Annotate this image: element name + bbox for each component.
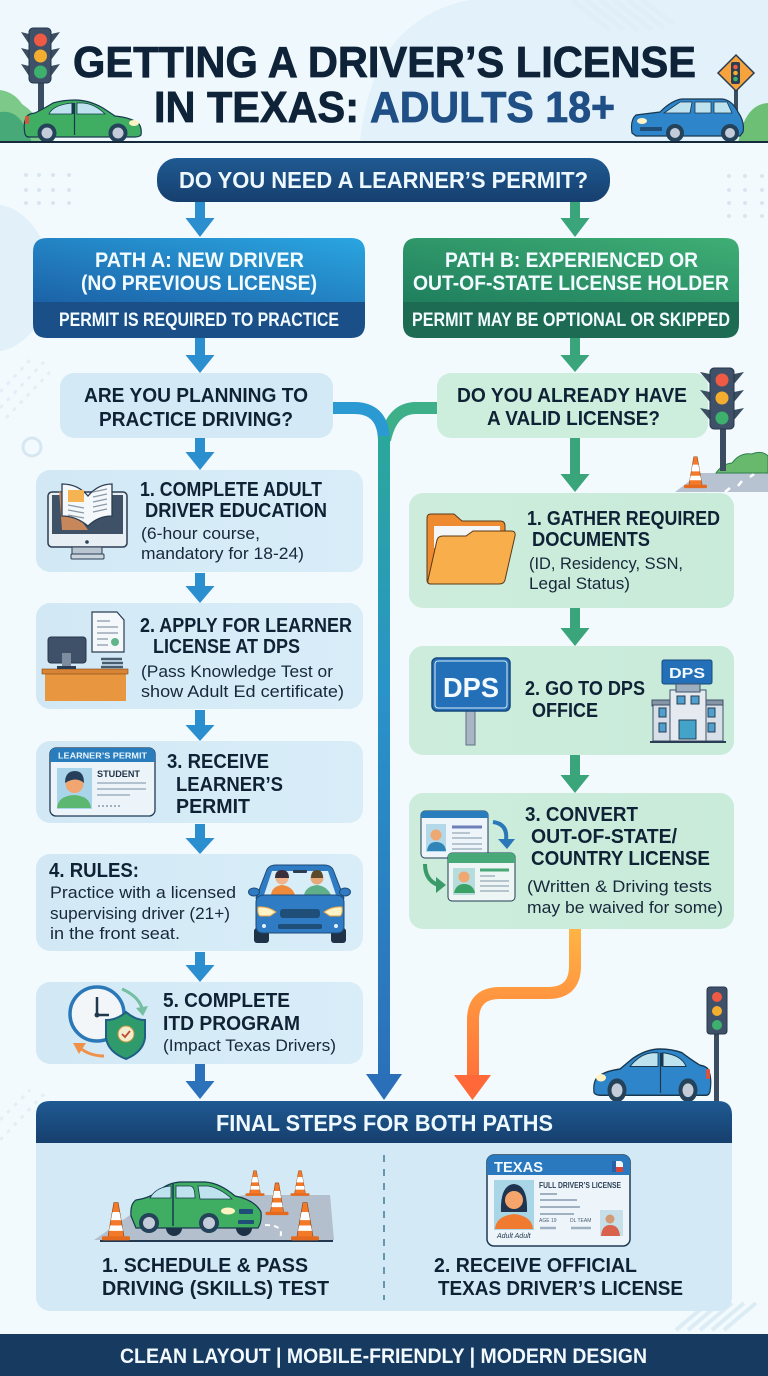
heading: final steps — [36, 1101, 732, 1143]
arrow: step B2 to B3 — [560, 755, 590, 793]
panel: step A2 apply for learner license — [36, 603, 363, 709]
panel: left question: PRACTICE DRIVING? — [99, 409, 293, 431]
arrow: path A to question — [186, 338, 214, 373]
icon: traffic light, cone and road — [675, 368, 768, 492]
panel: path A header: PATH A: NEW DRIVER — [95, 249, 304, 272]
icon: DPS building: DPS — [669, 665, 705, 682]
icon: Texas driver's license card: Adult Adult — [496, 1233, 532, 1240]
arrow: question to step A1 — [186, 438, 214, 470]
header ground line — [0, 141, 768, 143]
title highlight: ADULTS 18+ — [370, 83, 615, 132]
icon: Texas driver's license card: DL TEAM — [570, 1218, 591, 1224]
footer bar — [0, 1334, 768, 1376]
title line two: IN TEXAS: — [154, 83, 359, 132]
icon: Texas driver's license card — [487, 1155, 630, 1246]
panel: step A2 apply for learner license: (Pass Knowledge Test or — [141, 662, 333, 681]
icon: blue hatchback — [632, 99, 743, 142]
icon: two license cards with arrows — [421, 811, 515, 901]
heading: final steps: FINAL STEPS FOR BOTH PATHS — [216, 1110, 553, 1136]
panel: path B header: PATH B: EXPERIENCED OR — [445, 249, 698, 272]
arrow: step A5 to final steps — [186, 1064, 214, 1099]
panel: step A4 rules: 4. RULES: — [49, 860, 139, 882]
panel: path A header: PERMIT IS REQUIRED TO PRACTICE — [59, 310, 339, 331]
icon: green car — [24, 100, 141, 142]
panel: step A1 adult driver education: mandatory for 18-24) — [141, 544, 304, 563]
arrow: step A1 to A2 — [186, 573, 214, 603]
icon: diamond road sign — [718, 55, 754, 112]
icon: learner's permit card: STUDENT — [97, 769, 141, 779]
panel: step B1 gather documents — [409, 493, 734, 608]
text: step one: 1. SCHEDULE & PASS — [102, 1255, 308, 1277]
text: step two — [434, 1255, 683, 1300]
text: step one — [102, 1255, 329, 1300]
icon: orange folder — [427, 514, 515, 584]
icon: desk with computer and document — [42, 612, 128, 701]
panel: step A2 apply for learner license: LICENSE AT DPS — [153, 636, 300, 658]
icon: learner's permit card — [50, 748, 155, 816]
panel: final steps — [36, 1101, 732, 1311]
panel: path B header — [403, 238, 739, 338]
panel: step B1 gather documents: DOCUMENTS — [532, 529, 650, 551]
panel: step A1 adult driver education — [36, 470, 363, 572]
panel: step B3 convert license: COUNTRY LICENSE — [531, 848, 710, 870]
panel: step B3 convert license: 3. CONVERT — [525, 804, 638, 826]
panel: step A1 adult driver education: 1. COMPLETE ADULT — [140, 479, 322, 501]
panel: step B3 convert license: may be waived for some) — [527, 898, 723, 917]
panel: step A2 apply for learner license: 2. APPLY FOR LEARNER — [140, 615, 352, 637]
arrow: step A4 to A5 — [186, 952, 214, 982]
header illustration and title — [0, 28, 768, 143]
arrow: path B to question — [560, 338, 590, 372]
arrow: step B1 to B2 — [560, 608, 590, 646]
arrow: question to step B1 — [560, 438, 590, 492]
icon: DPS building — [650, 660, 726, 743]
icon: DPS road sign — [432, 658, 510, 745]
panel: step B2 go to DPS office: OFFICE — [532, 700, 598, 722]
panel: step A3 receive learner's permit: LEARNER’S — [176, 774, 283, 796]
panel: right question: DO YOU ALREADY HAVE — [457, 385, 687, 407]
icon: driving test car and cones — [94, 1171, 334, 1241]
panel: step A3 receive learner's permit: 3. RECEIVE — [167, 751, 269, 773]
text: step one: DRIVING (SKILLS) TEST — [102, 1278, 329, 1300]
icon: street traffic light and blue car — [594, 987, 727, 1102]
question pill — [157, 158, 610, 202]
panel: path A header — [33, 238, 365, 338]
panel: step B1 gather documents: Legal Status) — [529, 574, 630, 593]
icon: computer with book — [48, 484, 127, 559]
divider — [383, 1155, 385, 1300]
panel: step A4 rules — [36, 854, 363, 951]
panel: step A3 receive learner's permit — [36, 741, 363, 823]
panel: step A5 ITD program: (Impact Texas Drivers) — [163, 1036, 336, 1055]
icon: front view of car with two people — [248, 865, 350, 943]
panel: right question — [437, 373, 708, 438]
panel: step A4 rules: Practice with a licensed — [50, 883, 236, 902]
arrow: pill to path B — [560, 202, 590, 237]
panel: step A2 apply for learner license: show Adult Ed certificate) — [141, 682, 344, 701]
panel: left question: ARE YOU PLANNING TO — [84, 385, 308, 407]
text: step two: 2. RECEIVE OFFICIAL — [434, 1255, 637, 1277]
text: step two: TEXAS DRIVER’S LICENSE — [438, 1278, 683, 1300]
panel: step A3 receive learner's permit: PERMIT — [176, 796, 250, 818]
panel: step B3 convert license: (Written & Driving tests — [527, 877, 712, 896]
arrow: step A3 to A4 — [186, 824, 214, 854]
icon: clock and shield — [70, 987, 148, 1059]
panel: step B2 go to DPS office: 2. GO TO DPS — [525, 678, 645, 700]
icon: left bushes — [0, 90, 55, 142]
connector: path A and path B lines to final steps — [330, 408, 437, 1100]
panel: step B1 gather documents: 1. GATHER REQUIRED — [527, 508, 720, 530]
icon: learner's permit card: LEARNER’S PERMIT — [58, 750, 148, 760]
panel: step A1 adult driver education: DRIVER EDUCATION — [145, 500, 327, 522]
panel: right question: A VALID LICENSE? — [487, 408, 660, 430]
panel: step A5 ITD program: ITD PROGRAM — [163, 1013, 300, 1035]
icon: right bushes — [738, 103, 768, 142]
footer bar: CLEAN LAYOUT | MOBILE-FRIENDLY | MODERN DESIGN — [120, 1345, 647, 1368]
icon: DPS road sign: DPS — [443, 672, 499, 703]
panel: step B2 go to DPS office — [409, 646, 734, 755]
icon: Texas driver's license card: AGE 19 — [539, 1218, 557, 1224]
arrow: orange path to final steps — [454, 929, 575, 1100]
icon: Texas driver's license card: TEXAS — [494, 1159, 543, 1176]
panel: step B3 convert license: OUT-OF-STATE/ — [531, 826, 677, 848]
panel: step A5 ITD program: 5. COMPLETE — [163, 990, 290, 1012]
panel: step A4 rules: in the front seat. — [50, 924, 180, 943]
panel: step B3 convert license — [409, 793, 734, 929]
panel: step A4 rules: supervising driver (21+) — [50, 904, 230, 923]
arrow: pill to path A — [186, 202, 214, 237]
title line one: GETTING A DRIVER’S LICENSE — [73, 38, 696, 87]
icon: header traffic light — [21, 28, 60, 114]
panel: path A header: (NO PREVIOUS LICENSE) — [81, 272, 317, 295]
panel: left question — [60, 373, 333, 438]
panel: step A1 adult driver education: (6-hour course, — [141, 524, 260, 543]
question pill: DO YOU NEED A LEARNER’S PERMIT? — [179, 167, 588, 193]
panel: path B header: OUT-OF-STATE LICENSE HOLDER — [413, 272, 729, 295]
panel: step A5 ITD program — [36, 982, 363, 1064]
icon: Texas driver's license card: FULL DRIVER’S LICENSE — [539, 1181, 622, 1190]
panel: step B1 gather documents: (ID, Residency, SSN, — [529, 554, 683, 573]
arrow: step A2 to A3 — [186, 710, 214, 741]
